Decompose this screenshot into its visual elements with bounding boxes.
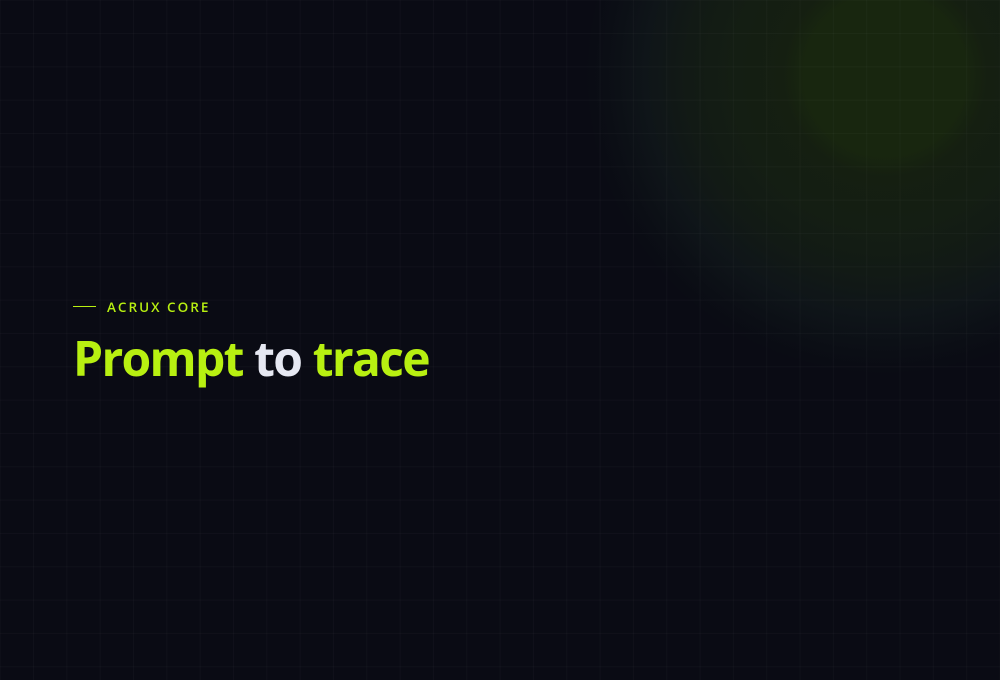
eyebrow label: ACRUX CORE bbox=[107, 298, 210, 316]
title: Prompt to trace bbox=[73, 326, 429, 391]
eyebrow rule bbox=[73, 306, 96, 307]
